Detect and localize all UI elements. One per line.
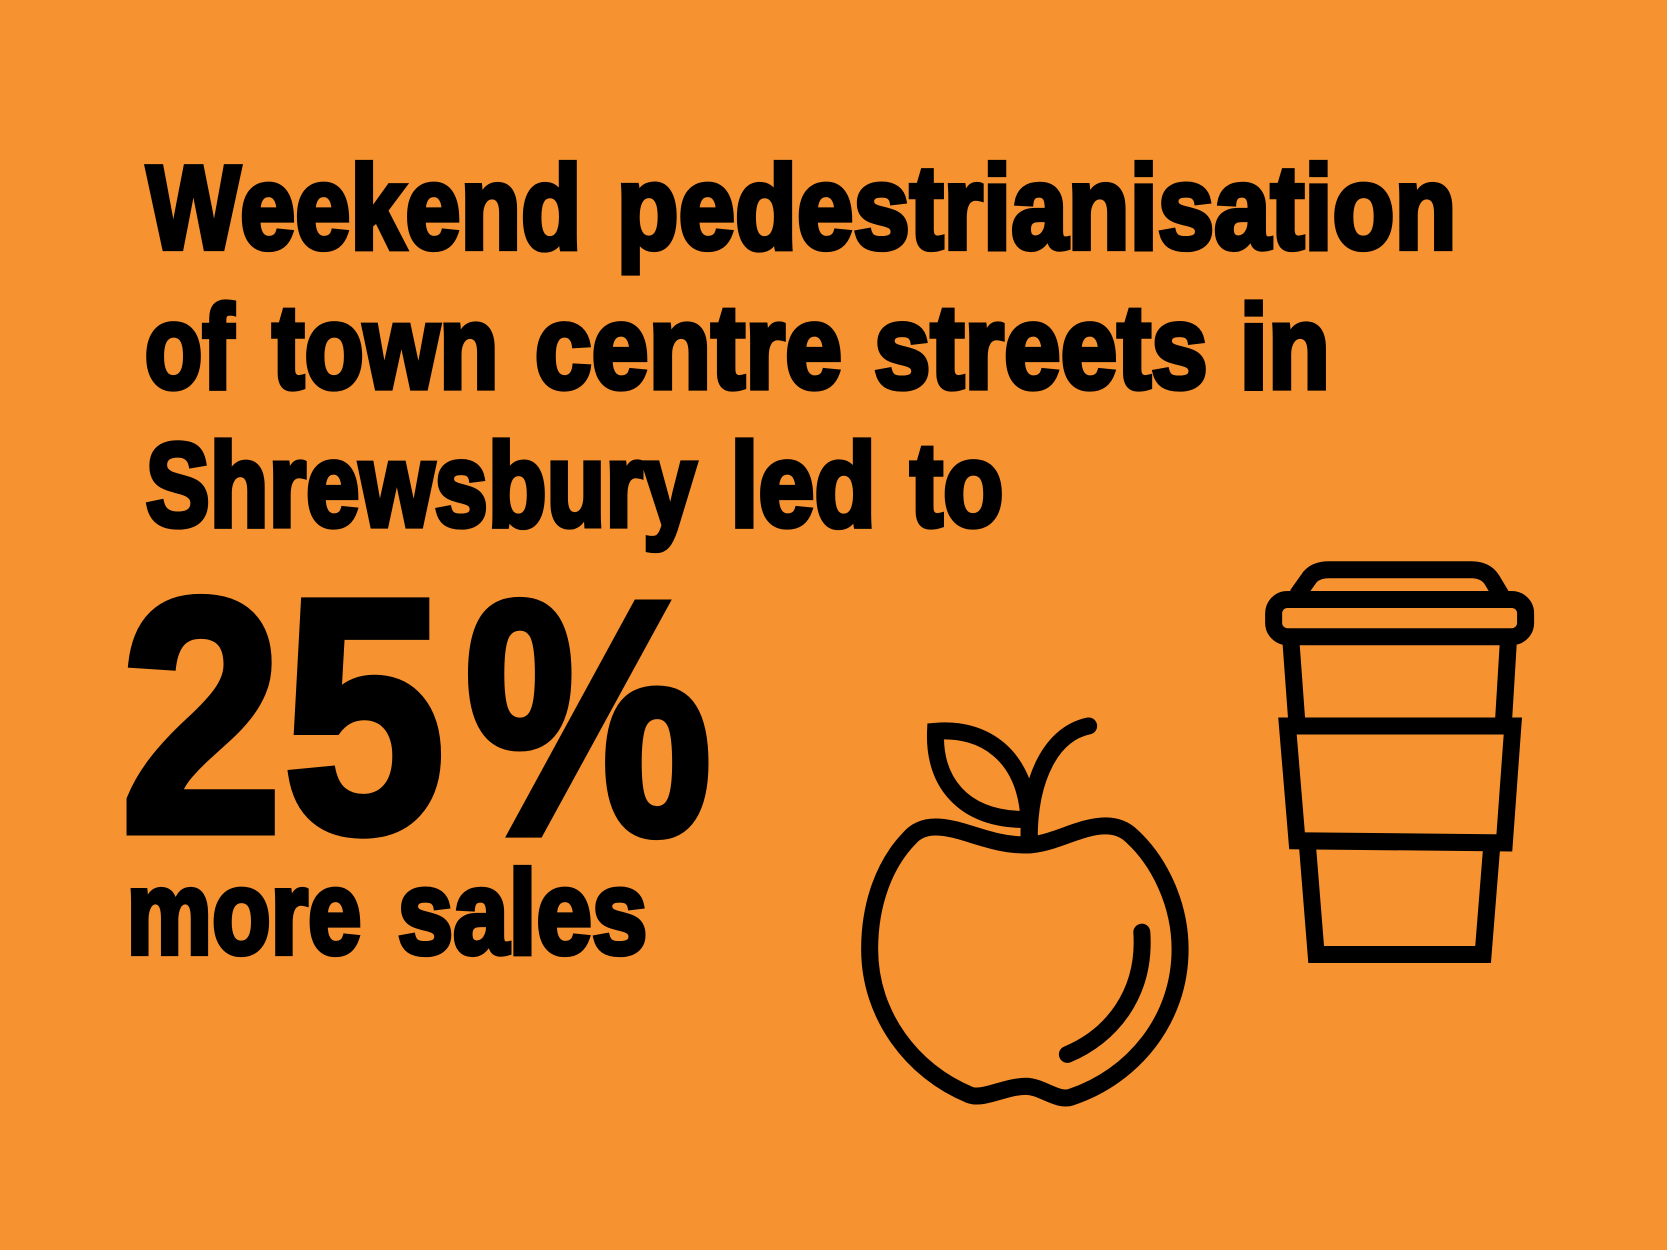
title: headline text: led <box>730 419 876 552</box>
title: headline text: to <box>910 419 1004 552</box>
title: headline text: Weekend <box>147 142 582 275</box>
key statistic: 25% <box>120 529 712 904</box>
stat caption: more sales: more <box>127 846 361 979</box>
title: headline text: in <box>1240 281 1330 414</box>
icon: takeaway coffee cup <box>1274 570 1526 955</box>
title: headline text: streets <box>874 281 1208 414</box>
key statistic: 25%: 25 <box>120 529 445 902</box>
title: headline text <box>145 142 1456 552</box>
title: headline text: centre <box>535 281 842 414</box>
title: headline text: of <box>145 281 234 414</box>
stat caption: more sales <box>127 846 647 979</box>
key statistic: 25%: % <box>465 531 712 904</box>
stat caption: more sales: sales <box>398 846 647 979</box>
title: headline text: town <box>272 281 499 414</box>
icon: apple <box>870 726 1180 1098</box>
title: headline text: Shrewsbury <box>146 419 696 552</box>
title: headline text: pedestrianisation <box>617 142 1456 275</box>
